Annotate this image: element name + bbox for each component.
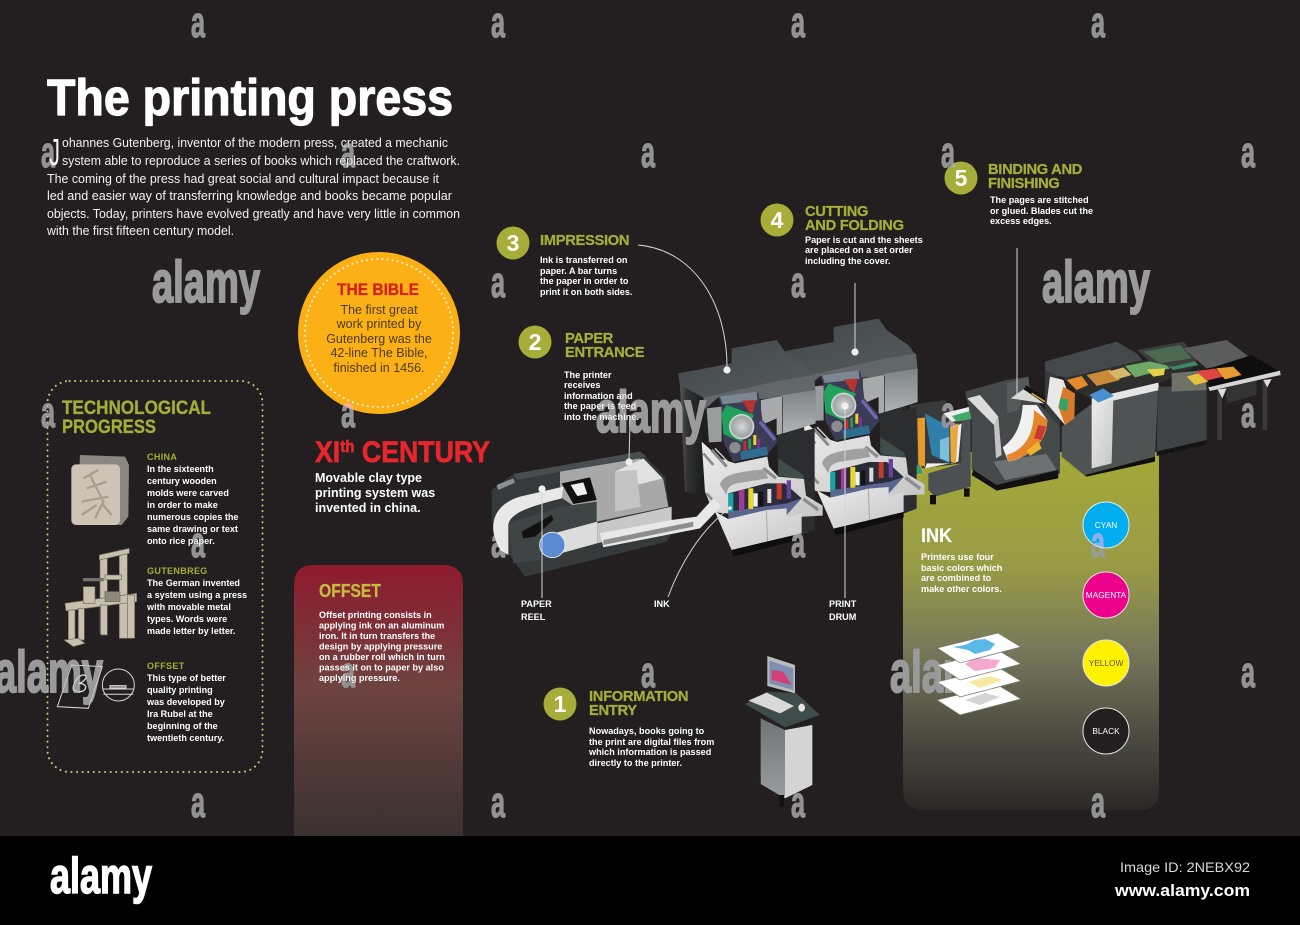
step 2: paper entrance: 2	[529, 329, 541, 355]
watermarks: a	[341, 648, 355, 697]
step 1: information entry: INFORMATION	[589, 689, 688, 705]
panel: ink: are combined to	[921, 573, 992, 583]
watermarks: a	[1091, 778, 1105, 827]
text: Gutenberg	[146, 566, 247, 636]
text: China: numerous copies the	[147, 512, 238, 522]
step 1: information entry: Nowadays, books going to	[589, 726, 705, 736]
colour swatches: YELLOW	[1089, 658, 1123, 668]
step 2: paper entrance: ENTRANCE	[565, 345, 645, 361]
panel: offset: iron. It in turn transfers the	[319, 631, 435, 641]
text: Gutenberg: a system using a press	[147, 590, 247, 600]
icon: computer terminal	[745, 656, 820, 807]
watermarks: a	[1091, 518, 1105, 567]
text: Gutenberg: The German invented	[147, 578, 240, 588]
watermarks: a	[41, 128, 55, 177]
step 5: binding and finishing: excess edges.	[990, 216, 1052, 226]
icon: offset plate	[57, 665, 134, 708]
panel: offset: Offset printing consists in	[319, 610, 432, 620]
footer bar: alamy	[50, 848, 152, 904]
watermarks: a	[791, 778, 805, 827]
panel: offset: applying ink on an aluminum	[319, 620, 444, 630]
footer bar: Image ID: 2NEBX92	[1120, 859, 1250, 875]
watermarks: a	[41, 388, 55, 437]
watermarks: a	[1241, 388, 1255, 437]
step 2: paper entrance: PAPER	[565, 331, 614, 347]
label: paper reel	[521, 599, 552, 622]
watermarks: a	[491, 518, 505, 567]
label: print drum: PRINT	[829, 599, 857, 609]
text: Offset: This type of better	[147, 673, 226, 683]
step 3: impression: paper. A bar turns	[540, 266, 617, 276]
watermarks: a	[191, 778, 205, 827]
step 3: impression: Ink is transferred on	[540, 255, 627, 265]
panel: technological progress: PROGRESS	[62, 416, 156, 438]
watermarks: a	[1241, 128, 1255, 177]
text: Gutenberg: types. Words were	[147, 614, 227, 624]
heading: XIth century: th	[340, 437, 355, 456]
text: China: in order to make	[147, 500, 218, 510]
strip top	[943, 402, 998, 422]
colour swatches: MAGENTA	[1086, 590, 1127, 600]
step 3: impression: print it on both sides.	[540, 287, 632, 297]
label: paper reel: PAPER	[521, 599, 552, 609]
panel: offset: on a rubber roll which in turn	[319, 652, 445, 662]
heading: XIth century: CENTURY	[355, 436, 490, 469]
panel: offset: applying pressure.	[319, 673, 400, 683]
heading: XIth century: Movable clay type	[315, 471, 422, 485]
text: Offset: twentieth century.	[147, 733, 224, 743]
machine: printer illustration	[492, 319, 1281, 577]
heading: XIth century: printing system was	[315, 486, 435, 500]
intro text block: led and easier way of transferring knowledge and books became popular	[47, 188, 453, 203]
watermarks: alamy	[596, 380, 706, 445]
label: print drum	[829, 599, 857, 622]
panel: technological progress: TECHNOLOGICAL	[62, 397, 211, 419]
watermarks: alamy	[890, 640, 998, 705]
footer bar	[0, 836, 1300, 925]
intro text block: The coming of the press had great social and cultural impact because it	[47, 171, 439, 186]
press units	[678, 319, 925, 557]
panel: the Bible: Gutenberg was the	[326, 332, 432, 346]
panel: ink: INK	[921, 526, 952, 547]
step 2: paper entrance: into the machine.	[564, 412, 639, 422]
panel: offset: OFFSET	[319, 581, 381, 601]
icon: carved stone	[71, 455, 129, 525]
panel: offset: design by applying pressure	[319, 642, 442, 652]
watermarks: a	[941, 388, 955, 437]
watermarks: a	[941, 128, 955, 177]
text: Offset: Ira Rubel at the	[147, 709, 213, 719]
icon: Gutenberg press	[64, 548, 137, 647]
watermarks: a	[491, 778, 505, 827]
text: China: same drawing or text	[147, 524, 238, 534]
panel: ink: basic colors which	[921, 563, 1002, 573]
heading: XIth century: invented in china.	[315, 501, 421, 515]
step 4: cutting and folding: are placed on a set order	[805, 245, 913, 255]
panel: the Bible: THE BIBLE	[337, 280, 419, 299]
folding unit	[910, 400, 962, 470]
step 1: information entry: which information is passed	[588, 747, 711, 757]
watermarks: alamy	[1042, 250, 1150, 315]
step 3: impression: 3	[507, 230, 519, 256]
reel module	[492, 452, 721, 577]
panel: the Bible	[298, 252, 460, 414]
panel: offset	[294, 565, 463, 836]
step 2: paper entrance: the paper is feed	[564, 401, 636, 411]
step 5: binding and finishing: BINDING AND	[988, 162, 1082, 178]
step 2: paper entrance: information and	[564, 391, 633, 401]
step 5: binding and finishing	[944, 162, 1093, 226]
step 4: cutting and folding: Paper is cut and the sheets	[805, 235, 923, 245]
curl unit	[965, 377, 1060, 490]
text: Gutenberg: made letter by letter.	[147, 626, 235, 636]
panel: offset: passes it on to paper by also	[319, 662, 444, 672]
step 1: information entry: ENTRY	[589, 703, 637, 719]
text: China: CHINA	[147, 452, 177, 462]
step 2: paper entrance: The printer	[564, 370, 612, 380]
text: Gutenberg: with movable metal	[146, 602, 231, 612]
step 5: binding and finishing: 5	[955, 165, 968, 191]
colour swatches	[1083, 502, 1129, 754]
intro text block: J	[49, 132, 60, 174]
leader lines	[538, 245, 1017, 598]
dark unit	[1137, 342, 1200, 367]
watermarks: a	[791, 258, 805, 307]
heading: XIth century: XI	[315, 436, 343, 469]
watermarks: a	[1241, 648, 1255, 697]
finishing units	[897, 340, 1281, 504]
intro text block	[46, 132, 460, 238]
step 4: cutting and folding: including the cover.	[805, 256, 890, 266]
step 5: binding and finishing: FINISHING	[988, 176, 1060, 192]
text: Offset	[146, 661, 226, 743]
panel: the Bible: finished in 1456.	[333, 361, 425, 375]
step 1: information entry: directly to the printer.	[589, 758, 682, 768]
watermarks: a	[641, 648, 655, 697]
step 5: binding and finishing: The pages are stitched	[990, 195, 1089, 205]
step 1: information entry: 1	[554, 691, 567, 717]
footer bar: www.alamy.com	[1114, 882, 1250, 900]
watermarks: a	[191, 518, 205, 567]
step 5: binding and finishing: or glued. Blades cut the	[990, 206, 1093, 216]
step 3: impression: IMPRESSION	[540, 233, 629, 249]
panel: the Bible: 42-line The Bible,	[330, 346, 428, 360]
panel: ink: make other colors.	[921, 584, 1002, 594]
panel: the Bible: work printed by	[336, 317, 422, 331]
step 1: information entry: the print are digital files from	[589, 737, 714, 747]
watermarks: a	[341, 128, 355, 177]
text: Gutenberg: GUTENBREG	[147, 566, 208, 576]
text: China	[147, 452, 238, 546]
watermarks: a	[341, 388, 355, 437]
panel: the Bible: The first great	[340, 303, 418, 317]
title: The printing press	[47, 69, 453, 126]
text: China: onto rice paper.	[147, 536, 215, 546]
panel: ink	[903, 452, 1159, 810]
intro text block: system able to reproduce a series of books which replaced the craftwork.	[62, 153, 460, 168]
step 4: cutting and folding: CUTTING	[805, 204, 868, 220]
panel: ink: Printers use four	[921, 552, 994, 562]
step 3: impression	[496, 226, 632, 297]
step 2: paper entrance: receives	[564, 380, 600, 390]
output tray	[1183, 340, 1253, 368]
label: print drum: DRUM	[829, 612, 856, 622]
panel: technological progress	[48, 381, 262, 772]
text: Offset: was developed by	[146, 697, 226, 707]
step 4: cutting and folding: AND FOLDING	[805, 218, 904, 234]
text: China: In the sixteenth	[147, 464, 214, 474]
intro text block: objects. Today, printers have evolved greatly and have very little in common	[47, 206, 460, 221]
watermarks: a	[491, 258, 505, 307]
intro text block: with the first fifteen century model.	[46, 223, 234, 238]
colour swatches: CYAN	[1095, 520, 1117, 530]
watermarks: a	[791, 518, 805, 567]
intro text block: ohannes Gutenberg, inventor of the modern press, created a mechanic	[62, 135, 448, 150]
watermarks: a	[641, 128, 655, 177]
text: China: century wooden	[147, 476, 217, 486]
step 4: cutting and folding	[760, 204, 923, 266]
text: China: molds were carved	[147, 488, 229, 498]
step 2: paper entrance	[518, 326, 645, 422]
text: Offset: OFFSET	[147, 661, 185, 671]
colour swatches: BLACK	[1092, 726, 1120, 736]
watermarks: alamy	[152, 250, 260, 315]
large unit	[1045, 342, 1143, 380]
step 3: impression: the paper in order to	[540, 276, 629, 286]
label: ink: INK	[654, 599, 670, 609]
heading: XIth century	[315, 436, 490, 515]
label: paper reel: REEL	[521, 612, 546, 622]
icon: colour separation sheets	[937, 633, 1021, 715]
text: Offset: beginning of the	[147, 721, 218, 731]
step 1: information entry	[544, 688, 714, 768]
text: Offset: quality printing	[147, 685, 213, 695]
step 4: cutting and folding: 4	[771, 207, 784, 233]
